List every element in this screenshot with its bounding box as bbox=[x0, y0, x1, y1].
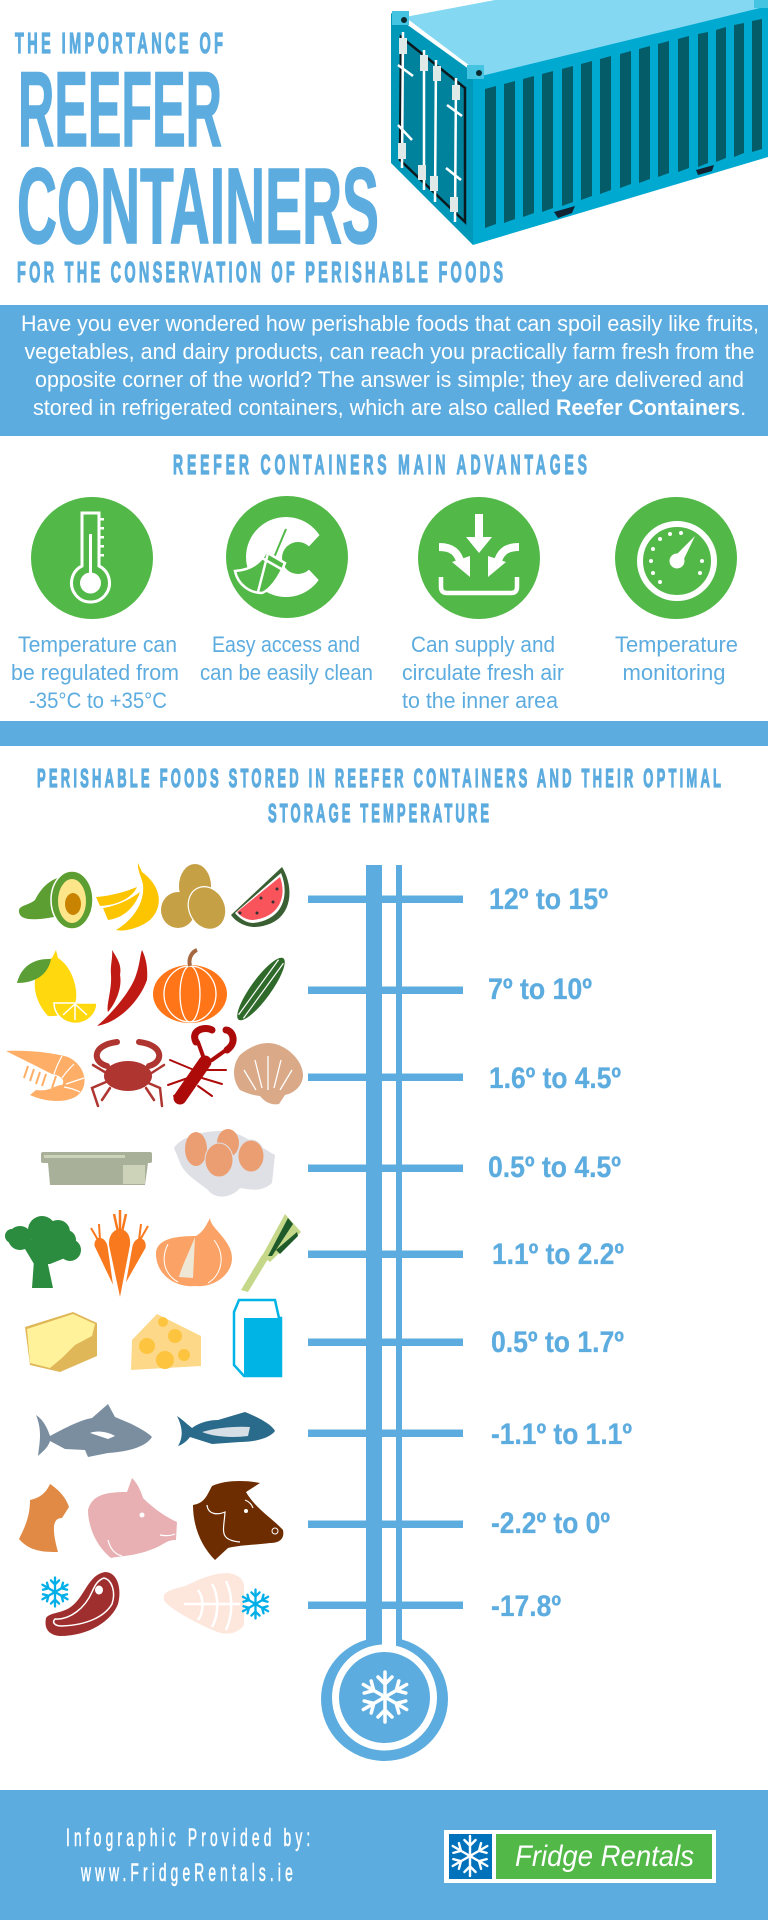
subtitle: for the conservation of perishable foods: FOR THE CONSERVATION OF PERISHABLE FOODS bbox=[17, 255, 503, 288]
caption bbox=[200, 632, 373, 685]
icon: pig bbox=[88, 1478, 177, 1558]
panel: advantage temperature monitoring bbox=[615, 497, 738, 685]
intro text: Reefer Containers bbox=[556, 395, 740, 420]
icon: snowflake blue right bbox=[241, 1590, 270, 1618]
title: the importance of reefer containers bbox=[15, 26, 503, 288]
temperature labels: -1.1º to 1.1º bbox=[491, 1418, 632, 1451]
temperature labels: -17.8º bbox=[491, 1590, 561, 1623]
icon: lobster bbox=[168, 1028, 233, 1098]
container side wall bbox=[473, 6, 768, 245]
footer band bbox=[0, 1790, 768, 1920]
title: the importance of reefer containers: REEFER bbox=[18, 49, 222, 169]
container end with doors bbox=[391, 13, 473, 245]
icon: butter box bbox=[41, 1152, 152, 1185]
thermometer bulb bbox=[321, 1628, 448, 1761]
temperature labels: 12º to 15º bbox=[489, 883, 608, 916]
icon: gauge bbox=[615, 497, 737, 619]
icon: potato bbox=[161, 864, 233, 936]
divider band bbox=[0, 721, 768, 746]
logo: fridge rentals: Fridge Rentals bbox=[515, 1840, 694, 1873]
icon: air flowing into tray bbox=[418, 497, 540, 619]
icons row: fish bbox=[36, 1404, 275, 1457]
thermometer tube bbox=[366, 865, 402, 1641]
temperature labels: 1.6º to 4.5º bbox=[489, 1062, 621, 1095]
heading: perishable foods: PERISHABLE FOODS STORED IN REEFER CONTAINERS AND THEIR OPTIMAL bbox=[37, 764, 721, 793]
icon: watermelon bbox=[231, 867, 289, 927]
panel: advantage fresh air bbox=[402, 497, 564, 713]
heading: perishable foods: STORAGE TEMPERATURE bbox=[268, 799, 489, 828]
icon: cow bbox=[193, 1481, 283, 1560]
heading: perishable foods bbox=[37, 764, 721, 828]
illustration: shipping container bbox=[391, 0, 768, 245]
icon: cheese bbox=[131, 1314, 201, 1370]
caption: Easy access and bbox=[212, 632, 360, 657]
icons row: butter cheese milk bbox=[25, 1300, 281, 1376]
icon: lemon bbox=[17, 950, 97, 1023]
temperature labels: 0.5º to 1.7º bbox=[491, 1326, 624, 1359]
icon: frozen steak bbox=[46, 1572, 119, 1636]
icon: shrimp bbox=[6, 1051, 85, 1101]
icon: frozen fish fillet bbox=[164, 1573, 244, 1634]
caption: can be easily clean bbox=[200, 660, 373, 685]
icon: banana bbox=[96, 863, 159, 931]
icon: butter bbox=[25, 1312, 97, 1372]
icons row: frozen meat and fish bbox=[40, 1572, 270, 1636]
panel: advantage easy clean bbox=[200, 496, 373, 685]
caption: Temperature can bbox=[18, 632, 177, 657]
forklift pockets bbox=[554, 206, 575, 218]
caption bbox=[402, 632, 564, 713]
icon: cucumber bbox=[231, 952, 291, 1026]
footer text: Infographic Provided by: bbox=[66, 1825, 310, 1852]
corner castings bbox=[392, 0, 768, 79]
intro band bbox=[0, 305, 768, 436]
icon: onion bbox=[156, 1218, 232, 1286]
icons row: avocado banana potato watermelon bbox=[19, 863, 289, 936]
icon: snowflake bbox=[360, 1672, 410, 1722]
intro text: stored in refrigerated containers, which are also called bbox=[33, 395, 550, 420]
container ribs bbox=[485, 19, 762, 228]
chart: thermometer scale bbox=[308, 865, 463, 1761]
container roof bbox=[405, 0, 768, 77]
icon: thermometer bbox=[31, 497, 153, 619]
temperature labels: 1.1º to 2.2º bbox=[492, 1238, 624, 1271]
icon: milk carton bbox=[234, 1300, 281, 1376]
caption: circulate fresh air bbox=[402, 660, 564, 685]
icon: snowflake blue left bbox=[40, 1578, 70, 1606]
intro text bbox=[21, 311, 759, 420]
title line: containers: CONTAINERS bbox=[17, 145, 379, 266]
panel: advantage temperature regulation bbox=[11, 497, 179, 713]
icon: broom bbox=[226, 496, 348, 618]
icons row: lemon chili pumpkin cucumber bbox=[17, 950, 291, 1026]
caption: be regulated from bbox=[11, 660, 179, 685]
intro text: vegetables, and dairy products, can reach you practically farm fresh from the bbox=[24, 339, 754, 364]
heading: main advantages: REEFER CONTAINERS MAIN ADVANTAGES bbox=[173, 449, 587, 480]
icon: scallop shell bbox=[234, 1043, 303, 1104]
icon: carrots bbox=[91, 1210, 148, 1297]
temperature labels: 7º to 10º bbox=[488, 973, 592, 1006]
footer text bbox=[66, 1825, 310, 1887]
icon: crab bbox=[92, 1042, 164, 1106]
title line: the importance of: THE IMPORTANCE OF bbox=[15, 26, 223, 59]
caption bbox=[615, 632, 738, 685]
intro text: opposite corner of the world? The answer is simple; they are delivered and bbox=[35, 367, 744, 392]
icon: broccoli bbox=[5, 1216, 81, 1288]
tick marks bbox=[308, 896, 463, 1609]
logo: fridge rentals bbox=[444, 1830, 716, 1883]
icon: mackerel bbox=[177, 1412, 275, 1446]
temperature labels: -2.2º to 0º bbox=[491, 1507, 610, 1540]
icons row: shrimp crab lobster shell bbox=[6, 1028, 303, 1106]
caption: Temperature bbox=[615, 632, 738, 657]
temperature labels: 0.5º to 4.5º bbox=[488, 1151, 621, 1184]
icons row: broccoli carrot onion leek bbox=[5, 1210, 301, 1297]
caption: -35°C to +35°C bbox=[29, 688, 167, 713]
caption: Can supply and bbox=[411, 632, 555, 657]
intro text: . bbox=[740, 395, 746, 420]
icon: chicken bbox=[19, 1484, 69, 1552]
caption: monitoring bbox=[622, 660, 726, 685]
footer text: www.FridgeRentals.ie bbox=[80, 1860, 293, 1887]
icons row: packaged box and eggs bbox=[41, 1129, 275, 1197]
caption: to the inner area bbox=[402, 688, 559, 713]
temperature labels bbox=[488, 883, 632, 1623]
icons row: chicken pig cow bbox=[19, 1478, 283, 1560]
icon: chili peppers bbox=[97, 950, 147, 1026]
icon: egg carton bbox=[174, 1129, 275, 1197]
icon: avocado bbox=[19, 871, 93, 929]
icon: pumpkin bbox=[153, 950, 227, 1023]
icon: leek bbox=[241, 1214, 301, 1292]
icon: tuna bbox=[36, 1404, 152, 1457]
caption bbox=[11, 632, 179, 713]
